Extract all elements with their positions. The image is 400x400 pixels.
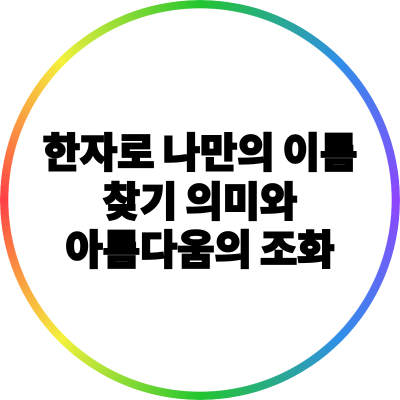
title: 아름다움의 조화 [65,227,335,273]
title [43,130,357,273]
title: 찾기 의미와 [103,178,297,224]
title: 한자로 나만의 이름 [43,130,357,176]
